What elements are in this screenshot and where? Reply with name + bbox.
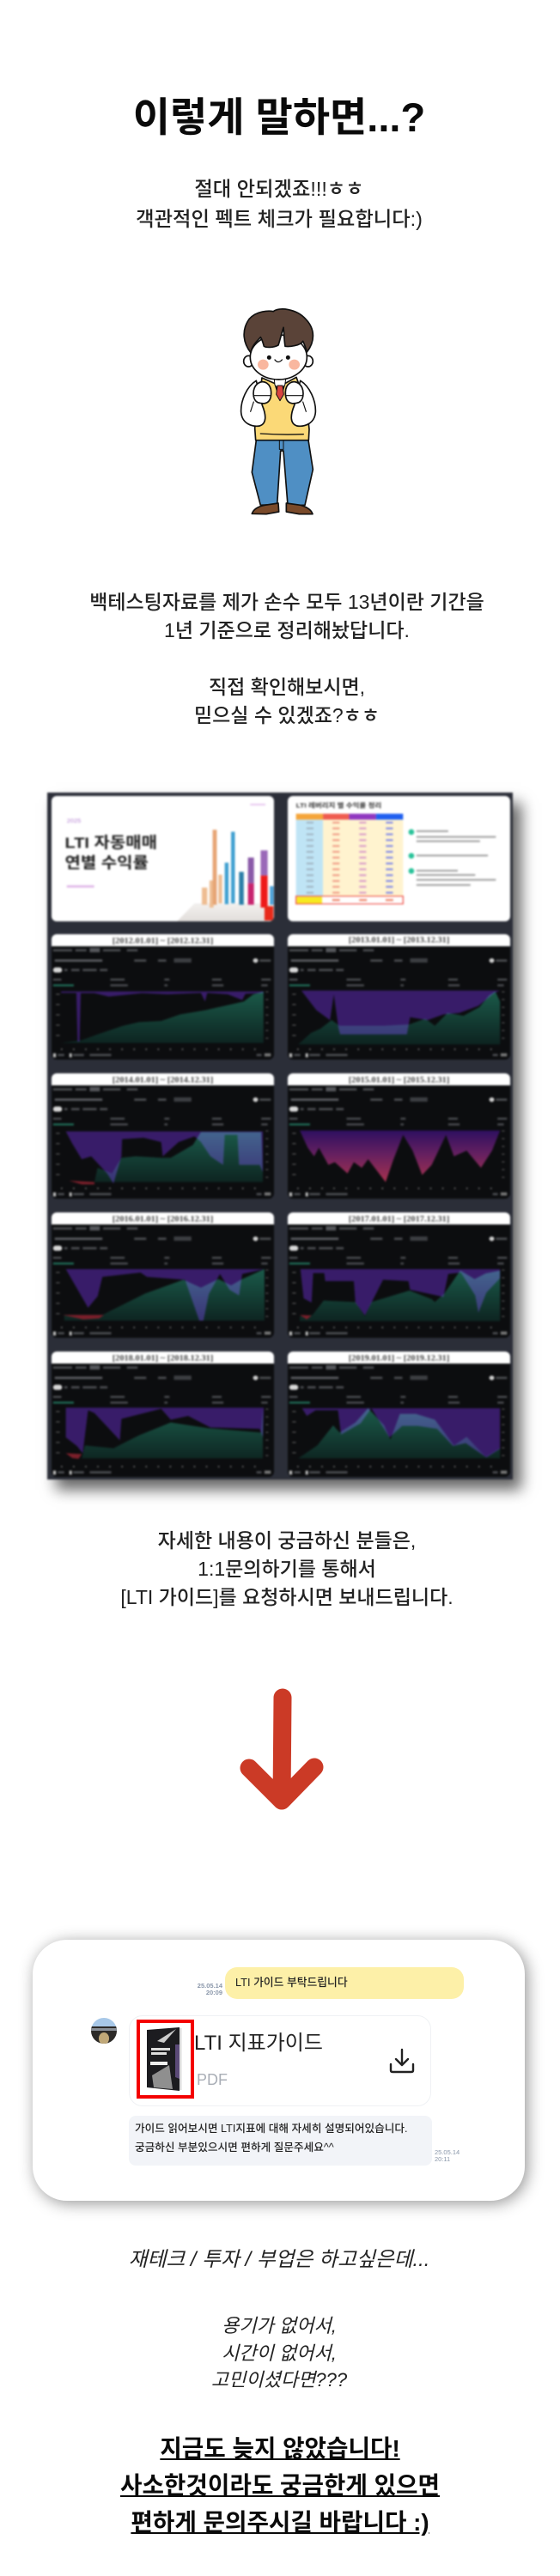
detail request text: 자세한 내용이 궁금하신 분들은, (158, 1529, 416, 1552)
timestamp: request (198, 1982, 222, 1996)
chart title: 2014 period: [2014.01.01] ~ [2014.12.31] (113, 1076, 213, 1084)
call to action: 사소한것이라도 궁금한게 있으면 (120, 2472, 440, 2499)
call to action: 지금도 늦지 않았습니다! (160, 2435, 400, 2462)
chart title: 2012 period: [2012.01.01] ~ [2012.12.31] (113, 937, 213, 945)
text: hesitation lines: 고민이셨다면??? (211, 2369, 347, 2391)
detail request text: 1:1문의하기를 통해서 (198, 1558, 376, 1580)
timestamp: request: 20:09 (206, 1989, 222, 1996)
chat bubble: reply: 가이드 읽어보시면 LTI지표에 대해 자세히 설명되어있습니다. (135, 2123, 408, 2135)
chat bubble: reply (129, 2116, 432, 2166)
icon: guide book cover (147, 2027, 182, 2091)
chart: 2018 (50, 1350, 276, 1478)
chat bubble: user request (225, 1967, 464, 1999)
timestamp: reply (435, 2148, 460, 2163)
intro text block (89, 591, 484, 726)
text: side job line: 재테크 / 투자 / 부업은 하고싶은데... (129, 2248, 429, 2271)
text: hesitation lines (211, 2315, 347, 2391)
chart: 2016 (50, 1211, 276, 1339)
intro text block: 백테스팅자료를 제가 손수 모두 13년이란 기간을 (89, 591, 484, 613)
icon: avatar (91, 2018, 117, 2044)
timestamp: reply: 20:11 (435, 2155, 450, 2163)
chart title: 2013 period: [2013.01.01] ~ [2013.12.31] (349, 936, 449, 945)
attachment type: PDF (197, 2071, 228, 2088)
chart title: 2016 period: [2016.01.01] ~ [2016.12.31] (113, 1215, 213, 1224)
slide: LTI yearly returns cover: 2025 (67, 818, 81, 824)
slide: LTI yearly returns cover: LTI 자동매매 (65, 835, 157, 852)
icon: cartoon boy character (240, 308, 316, 515)
chart: 2015 (286, 1072, 512, 1200)
chart: 2017 (286, 1211, 512, 1339)
timestamp: request: 25.05.14 (198, 1982, 222, 1990)
subtitle text: 절대 안되겠죠!!!ㅎㅎ (194, 178, 364, 200)
panel: chat screenshot card (33, 1940, 525, 2201)
text: hesitation lines: 용기가 없어서, (222, 2315, 337, 2336)
panel: backtest results collage (47, 793, 513, 1479)
slide: LTI yearly returns cover (50, 794, 276, 923)
arrow: red down arrow (240, 1688, 323, 1810)
timestamp: reply: 25.05.14 (435, 2148, 460, 2156)
chart title: 2019 period: [2019.01.01] ~ [2019.12.31] (349, 1354, 449, 1363)
attachment title: LTI 지표가이드 (194, 2032, 323, 2055)
subtitle text (136, 178, 423, 230)
attachment card (129, 2015, 431, 2106)
call to action (120, 2435, 440, 2536)
title: 이렇게 말하면...? (133, 94, 425, 140)
slide: LTI yearly returns cover: 연별 수익률 (65, 854, 149, 872)
call to action: 편하게 문의주시길 바랍니다 :) (131, 2509, 429, 2536)
slide: returns table by leverage: LTI 레버리지 별 수익률 정리 (296, 801, 381, 809)
chart: 2014 (50, 1072, 276, 1200)
chart title: 2018 period: [2018.01.01] ~ [2018.12.31] (113, 1354, 213, 1363)
slide: returns table by leverage (286, 794, 512, 923)
red highlight box (137, 2020, 194, 2099)
subtitle text: 객관적인 펙트 체크가 필요합니다:) (136, 208, 423, 230)
intro text block: 직접 확인해보시면, (209, 676, 365, 698)
intro text block: 믿으실 수 있겠죠?ㅎㅎ (194, 704, 380, 726)
detail request text: [LTI 가이드]를 요청하시면 보내드립니다. (120, 1586, 453, 1608)
chart: 2012 (50, 933, 276, 1060)
detail request text (120, 1529, 453, 1608)
text: hesitation lines: 시간이 없어서, (222, 2342, 337, 2363)
chart title: 2017 period: [2017.01.01] ~ [2017.12.31] (349, 1215, 449, 1224)
chat bubble: reply: 궁금하신 부분있으시면 편하게 질문주세요^^ (135, 2142, 334, 2154)
chat bubble: user request: LTI 가이드 부탁드립니다 (235, 1976, 348, 1989)
intro text block: 1년 기준으로 정리해놨답니다. (164, 619, 410, 641)
chart: 2019 (286, 1350, 512, 1478)
chart title: 2015 period: [2015.01.01] ~ [2015.12.31] (349, 1076, 449, 1084)
icon: download (390, 2049, 414, 2073)
chart: 2013 (286, 933, 512, 1060)
